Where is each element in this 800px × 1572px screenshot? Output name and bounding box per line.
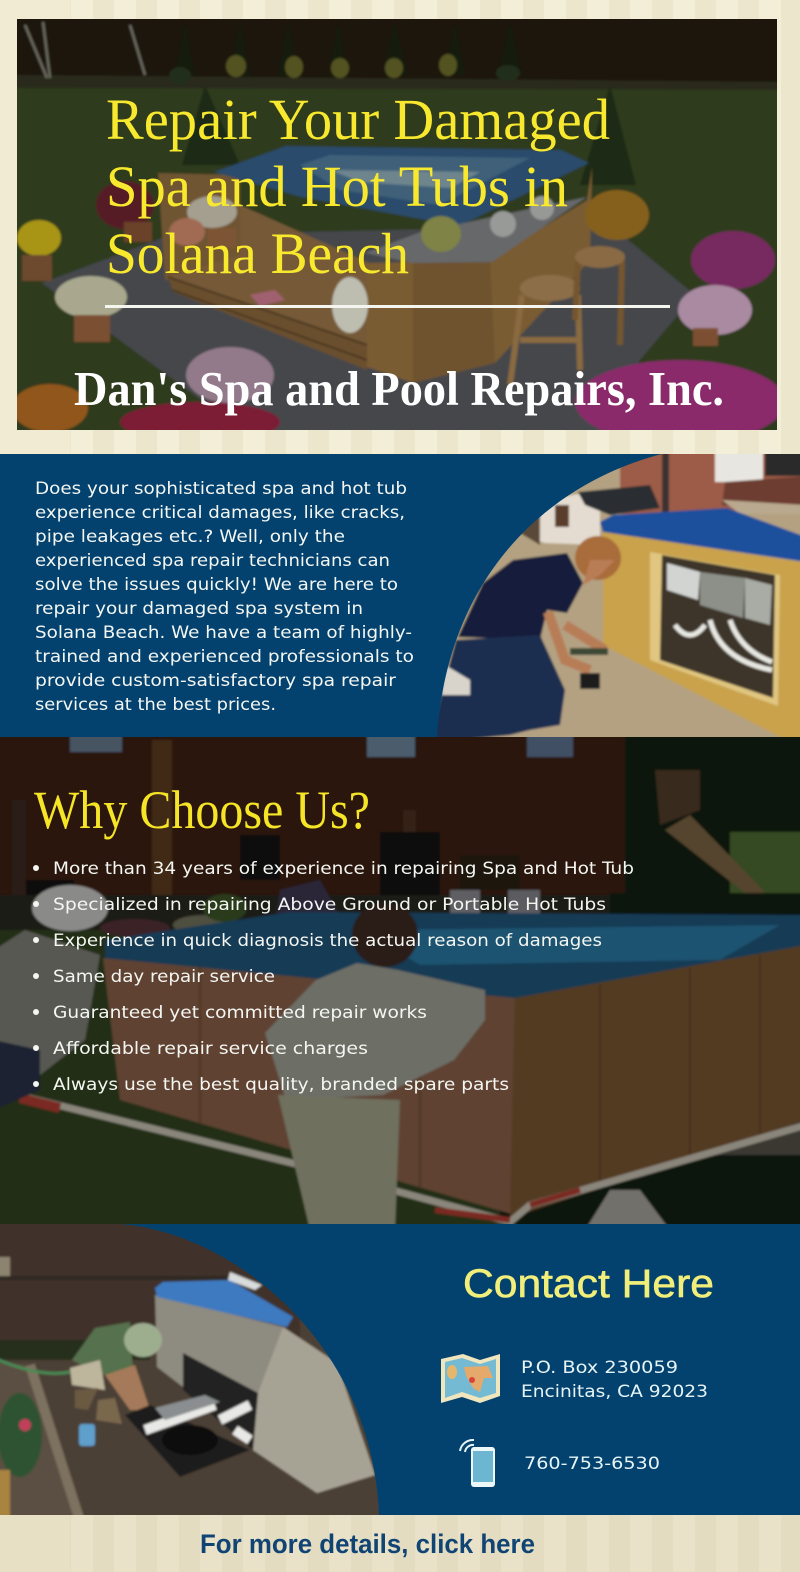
tub blue (214, 146, 589, 226)
panel: intro (0, 448, 800, 743)
footer band (0, 1515, 800, 1572)
list: reasons: Specialized in repairing Above Ground or Portable Hot Tubs (53, 895, 606, 914)
tub wood (103, 958, 515, 1215)
footer link text: For more details, click here (200, 1529, 535, 1559)
list: reasons: More than 34 years of experience in repairing Spa and Hot Tub (53, 859, 634, 878)
intro paragraph: repair your damaged spa system in (35, 599, 363, 618)
flowers (17, 220, 61, 256)
blue spa cover (600, 508, 800, 562)
address: Encinitas, CA 92023 (521, 1382, 708, 1402)
man centre (265, 963, 485, 1100)
man (458, 553, 583, 640)
steps (168, 277, 367, 370)
heading: contact here: Contact Here (463, 1262, 714, 1306)
list: reasons: Experience in quick diagnosis the actual reason of damages (53, 931, 602, 950)
intro paragraph (35, 479, 414, 714)
list: reasons: Guaranteed yet committed repair works (53, 1003, 427, 1022)
company name: Dan's Spa and Pool Repairs, Inc. (74, 361, 724, 416)
intro paragraph: provide custom-satisfactory spa repair (35, 671, 396, 690)
photo: technician servicing spa pump (0, 1218, 386, 1521)
phone number: 760-753-6530 (524, 1454, 660, 1474)
paving (42, 225, 695, 436)
hero title: Repair Your Damaged (106, 87, 610, 152)
counter (365, 197, 587, 263)
list: reasons (33, 859, 634, 1094)
intro paragraph: Solana Beach. We have a team of highly- (35, 623, 412, 642)
pump (125, 1405, 250, 1477)
intro paragraph: experienced spa repair technicians can (35, 551, 390, 570)
stone ornament (586, 1188, 668, 1224)
man (72, 1322, 133, 1375)
address (521, 1358, 708, 1402)
intro paragraph: Does your sophisticated spa and hot tub (35, 479, 407, 498)
tub (154, 1294, 284, 1394)
hero title (106, 87, 610, 286)
address: P.O. Box 230059 (521, 1358, 678, 1378)
hero title: Spa and Hot Tubs in (106, 154, 568, 219)
tub wood front (367, 167, 592, 383)
wood cabinet (603, 532, 800, 743)
icon: phone (460, 1440, 495, 1487)
panel: why choose us (0, 731, 800, 1230)
intro paragraph: experience critical damages, like cracks, (35, 503, 405, 522)
hero title: Solana Beach (106, 221, 409, 286)
icon: map (441, 1354, 500, 1403)
photo: men moving hot tub (0, 731, 800, 1230)
left man (0, 930, 100, 1090)
intro paragraph: solve the issues quickly! We are here to (35, 575, 398, 594)
intro paragraph: services at the best prices. (35, 695, 276, 714)
panel: contact (0, 1218, 800, 1521)
list: reasons: Always use the best quality, branded spare parts (53, 1075, 509, 1094)
tub blue rim (105, 912, 800, 1000)
striped cream background: top (0, 0, 800, 454)
intro paragraph: trained and experienced professionals to (35, 647, 414, 666)
stools (510, 295, 580, 385)
intro paragraph: pipe leakages etc.? Well, only the (35, 527, 345, 546)
photo: technician repairing spa (430, 448, 800, 743)
list: reasons: Same day repair service (53, 967, 275, 986)
list: reasons: Affordable repair service charges (53, 1039, 368, 1058)
trailer (17, 1095, 800, 1222)
heading: why choose us: Why Choose Us? (34, 780, 370, 840)
hero photo: hot tub on lawn (11, 13, 785, 444)
